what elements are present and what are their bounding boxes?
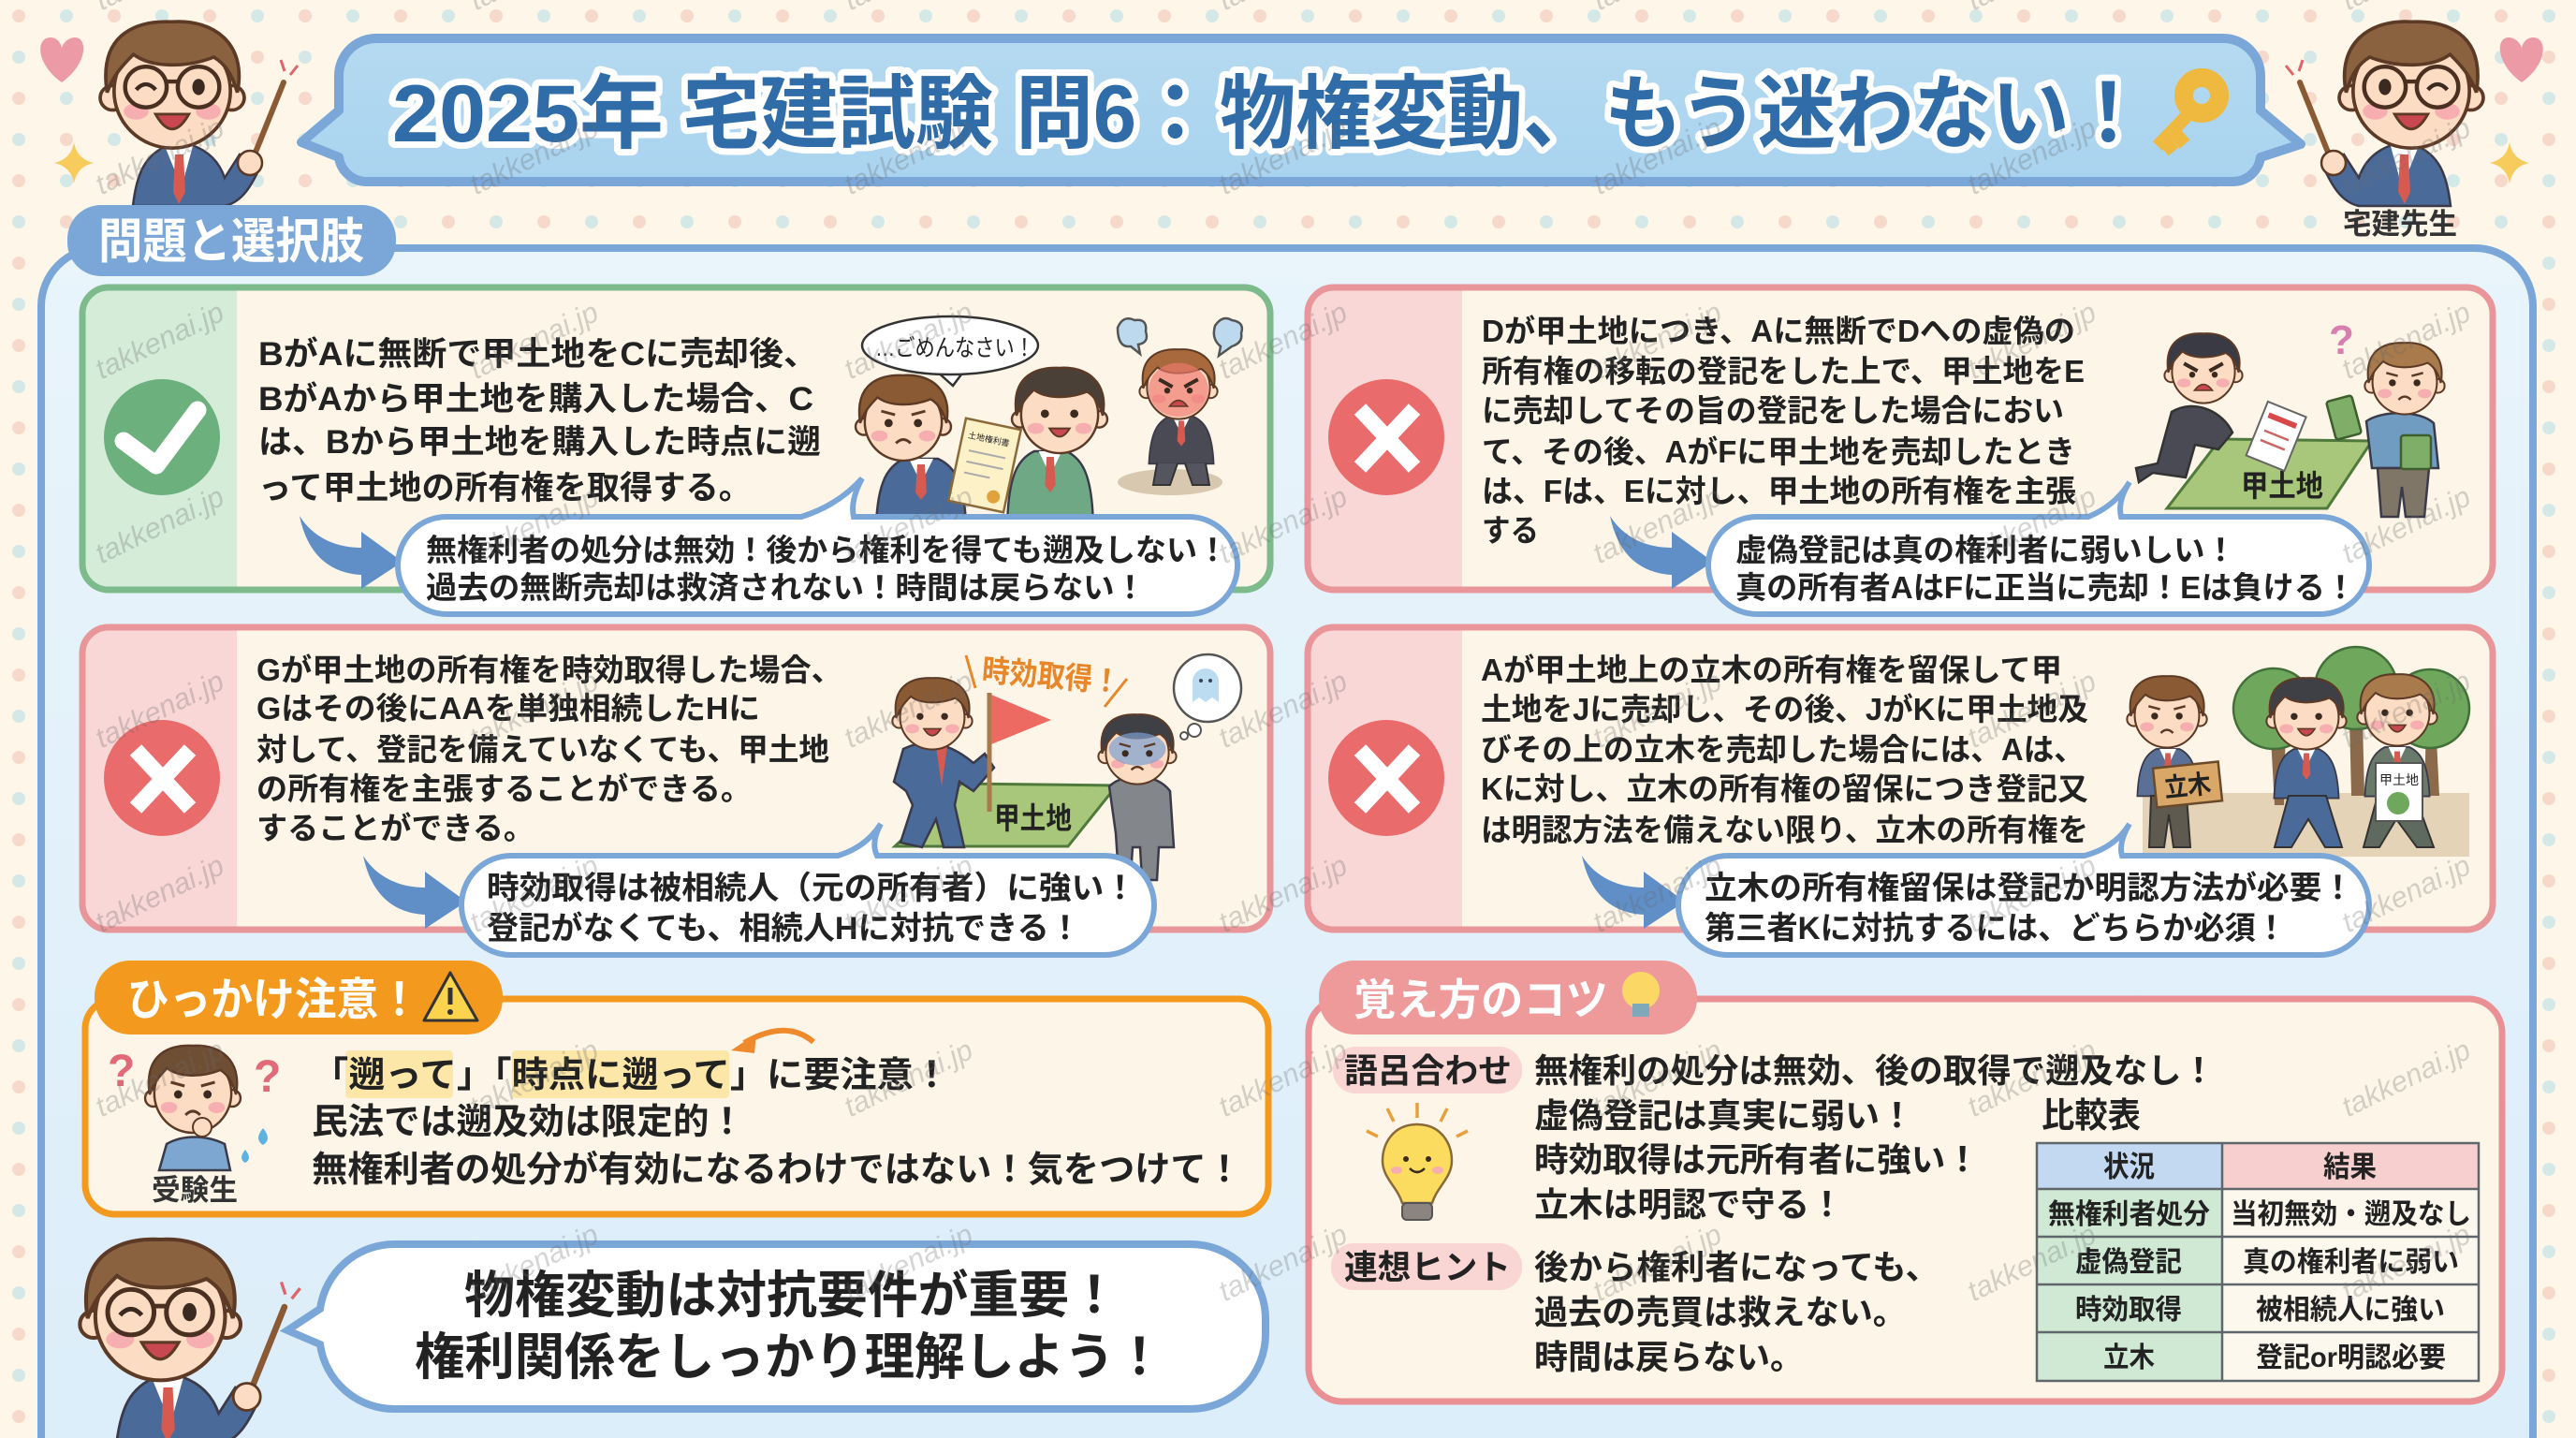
watermark grid: takkenai.jp: [839, 479, 978, 570]
explanation bubble 1: 過去の無断売却は救済されない！時間は戻らない！: [426, 570, 1146, 605]
watermark grid: takkenai.jp: [839, 110, 978, 201]
student character: ?: [254, 1052, 281, 1102]
comparison table title: 比較表: [2042, 1096, 2141, 1135]
mnemonic lines: [1534, 1051, 2216, 1224]
watermark grid: takkenai.jp: [839, 295, 978, 386]
hint lines: [1534, 1248, 1939, 1376]
watermark grid: takkenai.jp: [90, 110, 229, 201]
question text 4: は明認方法を備えない限り、立木の所有権を: [1481, 813, 2088, 847]
comparison table: 登記or明認必要: [2256, 1343, 2446, 1373]
watermark grid: takkenai.jp: [1588, 1033, 1727, 1123]
explanation bubble 1: [398, 478, 1237, 614]
illustration 2: forged document and parcel: [2136, 317, 2445, 517]
comparison table: 時効取得: [2075, 1295, 2182, 1326]
watermark grid: takkenai.jp: [1213, 1033, 1353, 1123]
watermark grid: takkenai.jp: [1213, 110, 1353, 201]
icon: key: [2158, 78, 2219, 152]
watermark grid: takkenai.jp: [2336, 848, 2476, 939]
watermark grid: takkenai.jp: [1588, 848, 1727, 939]
illustration 3: prescriptive acquisition flag on parcel: [892, 653, 1241, 880]
question text 1: は、Bから甲土地を購入した時点に遡: [258, 424, 821, 461]
tab: problems and choices: [67, 205, 396, 276]
arrow: orange curve: [731, 1031, 813, 1053]
watermark grid: takkenai.jp: [2336, 1033, 2476, 1123]
watermark grid: takkenai.jp: [1213, 295, 1353, 386]
student character: 受験生: [152, 1174, 238, 1207]
title text: 宅建試験: [682, 69, 993, 159]
watermark grid: takkenai.jp: [2336, 664, 2476, 755]
watermark grid: takkenai.jp: [2336, 110, 2476, 201]
question text 2: する: [1482, 513, 1539, 548]
question text 2: て、その後、AがFに甲土地を売却したとき: [1482, 434, 2075, 469]
icon: cross: [104, 720, 220, 836]
title text: もう迷わない！: [1604, 69, 2147, 159]
question text 1: って甲土地の所有権を取得する。: [258, 470, 752, 506]
arrow 3: [363, 856, 466, 929]
watermark grid: takkenai.jp: [1588, 1217, 1727, 1308]
question text 3: [256, 653, 842, 845]
watermark grid: takkenai.jp: [1962, 479, 2101, 570]
arrow 2: [1610, 516, 1713, 589]
explanation bubble 3: 時効取得は被相続人（元の所有者）に強い！: [487, 871, 1136, 906]
watermark grid: takkenai.jp: [90, 479, 229, 570]
watermark grid: takkenai.jp: [1213, 664, 1353, 755]
comparison table: 虚偽登記: [2075, 1247, 2182, 1278]
closing speech bubble: 権利関係をしっかり理解しよう！: [415, 1329, 1164, 1386]
teacher bottom: [80, 1240, 300, 1438]
card 1: correct choice: [82, 287, 1270, 614]
illustration 4: standing trees and three people: 立木: [2163, 769, 2213, 803]
explanation bubble 3: 登記がなくても、相続人Hに対抗できる！: [487, 910, 1081, 946]
comparison table: 真の権利者に弱い: [2243, 1247, 2459, 1278]
illustration 4: standing trees and three people: 甲土地: [2379, 772, 2419, 787]
tab: trap warning: [95, 961, 503, 1034]
explanation bubble 2: 真の所有者AはFに正当に売却！Eは負ける！: [1735, 570, 2356, 605]
watermark grid: takkenai.jp: [464, 1217, 604, 1308]
closing speech bubble: [287, 1244, 1266, 1409]
question text 3: の所有権を主張することができる。: [256, 771, 752, 806]
explanation bubble 4: 立木の所有権留保は登記か明認方法が必要！: [1705, 870, 2354, 906]
student character: ?: [108, 1047, 135, 1096]
tab: trap warning: ひっかけ注意！: [127, 976, 420, 1025]
watermark grid: takkenai.jp: [1213, 1217, 1353, 1308]
watermark grid: takkenai.jp: [2336, 1217, 2476, 1308]
watermark grid: takkenai.jp: [839, 848, 978, 939]
teacher right with heart and sparkle: [2286, 22, 2543, 206]
mnemonic lines: 時効取得は元所有者に強い！: [1534, 1140, 1980, 1179]
explanation bubble 3: [461, 824, 1154, 955]
watermark grid: takkenai.jp: [1962, 848, 2101, 939]
question text 2: [1482, 314, 2085, 548]
tab: memorization tips: 覚え方のコツ: [1354, 976, 1608, 1024]
tab: memorization tips: [1319, 961, 1697, 1034]
icon: cross: [1328, 720, 1444, 836]
teacher name label: 宅建先生: [2343, 208, 2457, 241]
question text 3: 対して、登記を備えていなくても、甲土地: [256, 732, 829, 767]
question text 2: は、Fは、Eに対し、甲土地の所有権を主張: [1482, 474, 2076, 508]
question text 2: に売却してその旨の登記をした場合におい: [1482, 393, 2064, 428]
watermark grid: takkenai.jp: [1962, 664, 2101, 755]
question text 4: Kに対し、立木の所有権の留保につき登記又: [1481, 771, 2088, 806]
trap text: 「遡って」「時点に遡って」に要注意！: [312, 1056, 950, 1095]
watermark grid: takkenai.jp: [90, 664, 229, 755]
watermark grid: takkenai.jp: [464, 848, 604, 939]
watermark grid: takkenai.jp: [90, 1033, 229, 1123]
illustration 1: apologizing seller, buyer and angry owner: [856, 316, 1242, 524]
question text 4: びその上の立木を売却した場合には、Aは、: [1481, 732, 2085, 767]
watermark grid: takkenai.jp: [464, 1033, 604, 1123]
watermark grid: takkenai.jp: [2336, 479, 2476, 570]
watermark grid: takkenai.jp: [2336, 295, 2476, 386]
title text: 物権変動、: [1220, 69, 1599, 159]
watermark grid: takkenai.jp: [464, 295, 604, 386]
mnemonic lines: 無権利の処分は無効、後の取得で遡及なし！: [1534, 1051, 2216, 1090]
mnemonic lines: 立木は明認で守る！: [1534, 1185, 1844, 1224]
comparison table: 結果: [2323, 1151, 2377, 1183]
illustration 3: prescriptive acquisition flag on parcel: 時効取得！: [981, 653, 1121, 699]
title text: 問6：: [1016, 69, 1214, 159]
question text 4: Aが甲土地上の立木の所有権を留保して甲: [1481, 653, 2062, 687]
explanation bubble 4: 第三者Kに対抗するには、どちらか必須！: [1705, 911, 2287, 946]
question text 4: [1481, 653, 2088, 847]
card 2: wrong choice: [1308, 287, 2493, 614]
watermark grid: takkenai.jp: [1213, 848, 1353, 939]
watermark grid: takkenai.jp: [1962, 1033, 2101, 1123]
icon: light bulb: [1367, 1103, 1468, 1220]
question text 2: 所有権の移転の登記をした上で、甲土地をE: [1482, 354, 2085, 389]
question text 1: [258, 336, 821, 506]
trap text: [312, 1056, 1242, 1190]
watermark grid: takkenai.jp: [839, 1033, 978, 1123]
illustration 1: apologizing seller, buyer and angry owner: …ごめんなさい！: [875, 335, 1034, 361]
arrow 1: [300, 516, 402, 589]
panel: trap warning: [85, 961, 1268, 1214]
pill: goroawase: 語呂合わせ: [1344, 1051, 1512, 1090]
mnemonic lines: 虚偽登記は真実に弱い！: [1534, 1096, 1914, 1135]
comparison table: 無権利者処分: [2048, 1199, 2210, 1230]
illustration 2: forged document and parcel: ?: [2329, 317, 2354, 363]
card 4: wrong choice: [1308, 627, 2493, 955]
title text: 2025年: [392, 69, 664, 159]
watermark grid: takkenai.jp: [1588, 295, 1727, 386]
panel: memorization tips: [1309, 961, 2502, 1401]
hint lines: 時間は戻らない。: [1534, 1338, 1804, 1376]
illustration 1: apologizing seller, buyer and angry owner: 土地権利書: [967, 430, 1011, 448]
watermark grid: takkenai.jp: [1213, 479, 1353, 570]
card 3: wrong choice: [82, 627, 1270, 955]
illustration 4: standing trees and three people: [2127, 647, 2469, 857]
student character: [108, 1046, 281, 1207]
watermark grid: takkenai.jp: [1588, 479, 1727, 570]
title banner: [301, 38, 2301, 182]
watermark grid: takkenai.jp: [464, 110, 604, 201]
watermark grid: takkenai.jp: [90, 848, 229, 939]
comparison table: 当初無効・遡及なし: [2231, 1199, 2471, 1230]
watermark grid: takkenai.jp: [1962, 295, 2101, 386]
watermark grid: takkenai.jp: [839, 664, 978, 755]
question text 1: BがAから甲土地を購入した場合、C: [258, 381, 813, 418]
question text 2: Dが甲土地につき、Aに無断でDへの虚偽の: [1482, 314, 2075, 348]
question text 4: 土地をJに売却し、その後、JがKに甲土地及: [1481, 692, 2088, 726]
comparison table: 状況: [2103, 1151, 2155, 1183]
closing speech bubble: 物権変動は対抗要件が重要！: [464, 1268, 1120, 1324]
highlights on keywords: [345, 1050, 729, 1098]
watermark grid: takkenai.jp: [1588, 664, 1727, 755]
watermark grid: takkenai.jp: [1962, 1217, 2101, 1308]
icon: check: [104, 379, 220, 495]
watermark grid: takkenai.jp: [464, 479, 604, 570]
pill: association hint: 連想ヒント: [1344, 1248, 1511, 1286]
watermark grid: takkenai.jp: [1588, 110, 1727, 201]
comparison table: 立木: [2103, 1343, 2155, 1373]
explanation bubble 2: [1708, 482, 2369, 614]
illustration 3: prescriptive acquisition flag on parcel: 甲土地: [994, 801, 1072, 835]
explanation bubble 1: 無権利者の処分は無効！後から権利を得ても遡及しない！: [426, 533, 1228, 567]
watermark grid: takkenai.jp: [464, 664, 604, 755]
tab: problems and choices: 問題と選択肢: [98, 215, 364, 270]
teacher left with heart and sparkle: [40, 22, 298, 206]
question text 3: Gが甲土地の所有権を時効取得した場合、: [256, 653, 842, 687]
explanation bubble 4: [1678, 824, 2369, 955]
title text: [392, 69, 2147, 159]
trap text: 無権利者の処分が有効になるわけではない！気をつけて！: [312, 1151, 1242, 1190]
trap text: 民法では遡及効は限定的！: [312, 1103, 745, 1142]
arrow 4: [1582, 856, 1685, 929]
question text 3: Gはその後にAAを単独相続したHに: [256, 691, 760, 726]
comparison table: 被相続人に強い: [2256, 1295, 2445, 1326]
watermark grid: takkenai.jp: [839, 1217, 978, 1308]
comparison table: [2037, 1143, 2479, 1381]
illustration 2: forged document and parcel: 甲土地: [2241, 469, 2323, 503]
explanation bubble 2: 虚偽登記は真の権利者に弱いしい！: [1735, 533, 2236, 567]
hint lines: 過去の売買は救えない。: [1534, 1293, 1907, 1331]
hint lines: 後から権利者になっても、: [1534, 1248, 1939, 1286]
icon: cross: [1328, 379, 1444, 495]
watermark grid: takkenai.jp: [90, 295, 229, 386]
watermark grid: takkenai.jp: [1962, 110, 2101, 201]
question text 1: BがAに無断で甲土地をCに売却後、: [258, 336, 818, 373]
question text 3: することができる。: [256, 811, 534, 845]
